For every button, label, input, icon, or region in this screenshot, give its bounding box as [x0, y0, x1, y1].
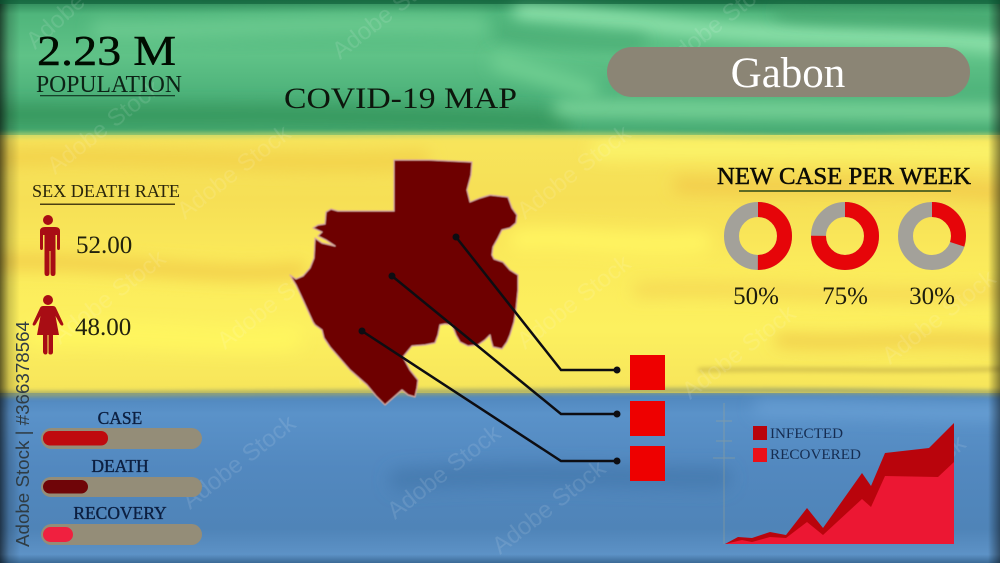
donut: 75% [818, 210, 872, 262]
male value: 52.00 [76, 232, 132, 259]
red value squares [630, 355, 665, 481]
watermarks: Adobe Stock [677, 299, 802, 405]
yellow streaks [0, 157, 420, 162]
donut labels: 75% [822, 283, 868, 310]
legend: RECOVERED [770, 447, 861, 463]
donut labels: 30% [909, 283, 955, 310]
death label: DEATH [91, 456, 149, 476]
recovery bar [41, 524, 202, 545]
legend: INFECTED [770, 426, 843, 442]
stock id label: Adobe Stock | #366378564 [13, 321, 33, 547]
watermarks: Adobe Stock [42, 74, 167, 180]
watermarks: Adobe Stock [512, 249, 637, 355]
donut labels [733, 283, 955, 310]
population block [36, 29, 182, 98]
population value: 2.23 M [37, 29, 176, 75]
case bar [41, 428, 202, 449]
line: lower marker [358, 328, 620, 464]
watermarks: Adobe Stock [47, 244, 172, 350]
recovery label: RECOVERY [73, 503, 167, 523]
heading: NEW CASE PER WEEK [717, 164, 972, 190]
watermarks: Adobe Stock [172, 119, 297, 225]
watermarks: Adobe Stock [487, 454, 612, 560]
panel: new case per week [717, 164, 972, 310]
line: middle marker [388, 272, 620, 418]
line: upper marker [452, 234, 620, 374]
area: recovered [725, 462, 954, 544]
watermarks: Adobe Stock [847, 429, 972, 535]
donut: 30% [906, 210, 958, 262]
leader lines [358, 234, 620, 464]
legend [753, 426, 861, 463]
panel: progress bars [41, 408, 202, 545]
watermarks: Adobe Stock [382, 419, 507, 525]
title: COVID-19 MAP [284, 82, 517, 115]
donut: 50% [732, 210, 784, 262]
death bar [41, 477, 202, 497]
watermarks: Adobe Stock [347, 284, 472, 390]
green streaks [520, 12, 1000, 44]
female value: 48.00 [75, 314, 131, 341]
case label: CASE [98, 408, 142, 428]
country name: Gabon [731, 50, 845, 97]
panel: sex death rate [32, 181, 180, 354]
icon: female figure [33, 295, 63, 354]
map of Gabon [290, 160, 518, 405]
country pill [607, 47, 970, 97]
icon: male figure [40, 215, 60, 276]
watermarks: Adobe Stock [177, 409, 302, 515]
population label: POPULATION [36, 72, 182, 98]
area: infected [725, 423, 954, 544]
band transitions [0, 135, 1000, 137]
heading: SEX DEATH RATE [32, 181, 180, 201]
blue streaks [400, 475, 720, 480]
watermarks: Adobe Stock [512, 119, 637, 225]
chart axes [713, 403, 735, 544]
watermarks: Adobe Stock [212, 249, 337, 355]
watermarks: Adobe Stock [877, 264, 1000, 370]
panel: area chart [713, 403, 954, 544]
donut labels: 50% [733, 283, 779, 310]
